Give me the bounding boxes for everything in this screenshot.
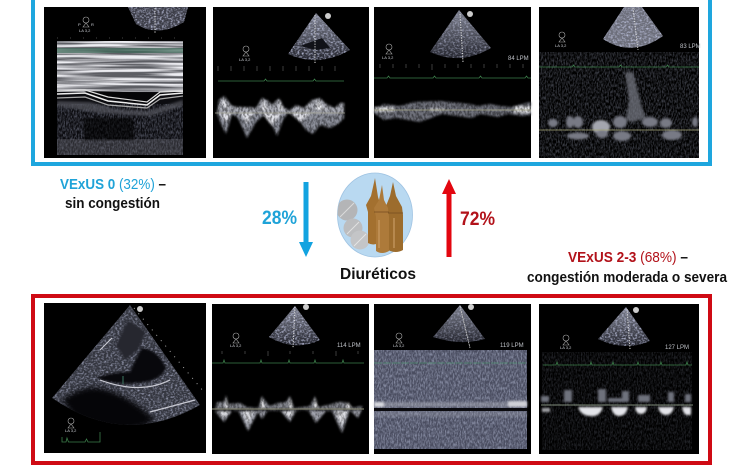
- probe marker: LA 3,2: [239, 57, 251, 62]
- tablets: [336, 200, 370, 250]
- probe marker: LA 3,2: [555, 43, 567, 48]
- ECG trace: [374, 76, 531, 78]
- probe marker: [393, 333, 405, 348]
- probe marker: LA 3,2: [79, 28, 91, 33]
- ampoules: [366, 178, 403, 253]
- hepatic vein Doppler: [213, 7, 369, 158]
- renal vein Doppler: [539, 304, 699, 454]
- heart rate: 119 LPM: [500, 343, 524, 349]
- text: VExUS 2-3 label: congestión moderada o severa: [527, 269, 728, 286]
- ECG trace: [539, 65, 699, 67]
- probe marker: [65, 418, 77, 433]
- probe marker: LA 3,2: [560, 345, 572, 350]
- ECG trace: [374, 362, 527, 364]
- heart rate: 114 LPM: [337, 343, 361, 349]
- heart rate: 84 LPM: [508, 56, 529, 62]
- text: VExUS 0 label: [60, 176, 166, 212]
- Doppler envelope: [541, 389, 691, 416]
- text: VExUS 0 label: VExUS 0 (32%) –: [60, 176, 166, 193]
- probe marker: [230, 333, 242, 348]
- ECG trace: [218, 79, 344, 81]
- Doppler envelope: [215, 395, 362, 433]
- M-mode ultrasound image: [44, 7, 206, 158]
- portal vein Doppler: [374, 304, 531, 454]
- text: 28%: 28%: [262, 208, 297, 229]
- subcostal IVC ultrasound: [44, 303, 206, 453]
- ECG trace: [212, 360, 364, 363]
- probe marker: R: [91, 22, 94, 27]
- panel: VExUS 2-3 frame: [33, 296, 710, 463]
- text: VExUS 2-3 label: [527, 249, 728, 286]
- text: VExUS 0 label: sin congestión: [65, 195, 160, 212]
- icon: diuretics: [336, 173, 412, 257]
- probe marker: [555, 32, 567, 48]
- ECG trace: [62, 432, 100, 442]
- hepatic vein Doppler: [212, 304, 369, 454]
- portal vein Doppler: [374, 7, 531, 158]
- probe marker: LA 3,2: [382, 55, 394, 60]
- probe marker: [239, 46, 251, 62]
- arrow: down blue: [299, 182, 313, 257]
- ECG trace: [543, 362, 692, 365]
- heart rate: 83 LPM: [680, 44, 701, 50]
- Doppler envelope: [217, 96, 344, 138]
- probe marker: [560, 335, 572, 350]
- probe marker: LA 3,2: [230, 343, 242, 348]
- probe marker: LA 3,2: [393, 343, 405, 348]
- probe marker: [382, 44, 394, 60]
- Doppler band: [374, 401, 527, 417]
- text: Diuréticos: Diuréticos: [340, 266, 416, 283]
- Doppler envelope: [374, 101, 531, 122]
- renal vein Doppler: [539, 7, 701, 158]
- arrow: up red: [442, 179, 456, 257]
- Doppler envelope: [548, 72, 698, 141]
- probe marker: P: [78, 22, 81, 27]
- probe marker: LA 3,2: [65, 428, 77, 433]
- text: 72%: 72%: [460, 209, 495, 230]
- panel: VExUS 0 frame: [33, 0, 710, 164]
- heart rate: 127 LPM: [665, 345, 689, 351]
- probe marker: [78, 17, 94, 33]
- text: VExUS 2-3 label: VExUS 2-3 (68%) –: [568, 249, 688, 266]
